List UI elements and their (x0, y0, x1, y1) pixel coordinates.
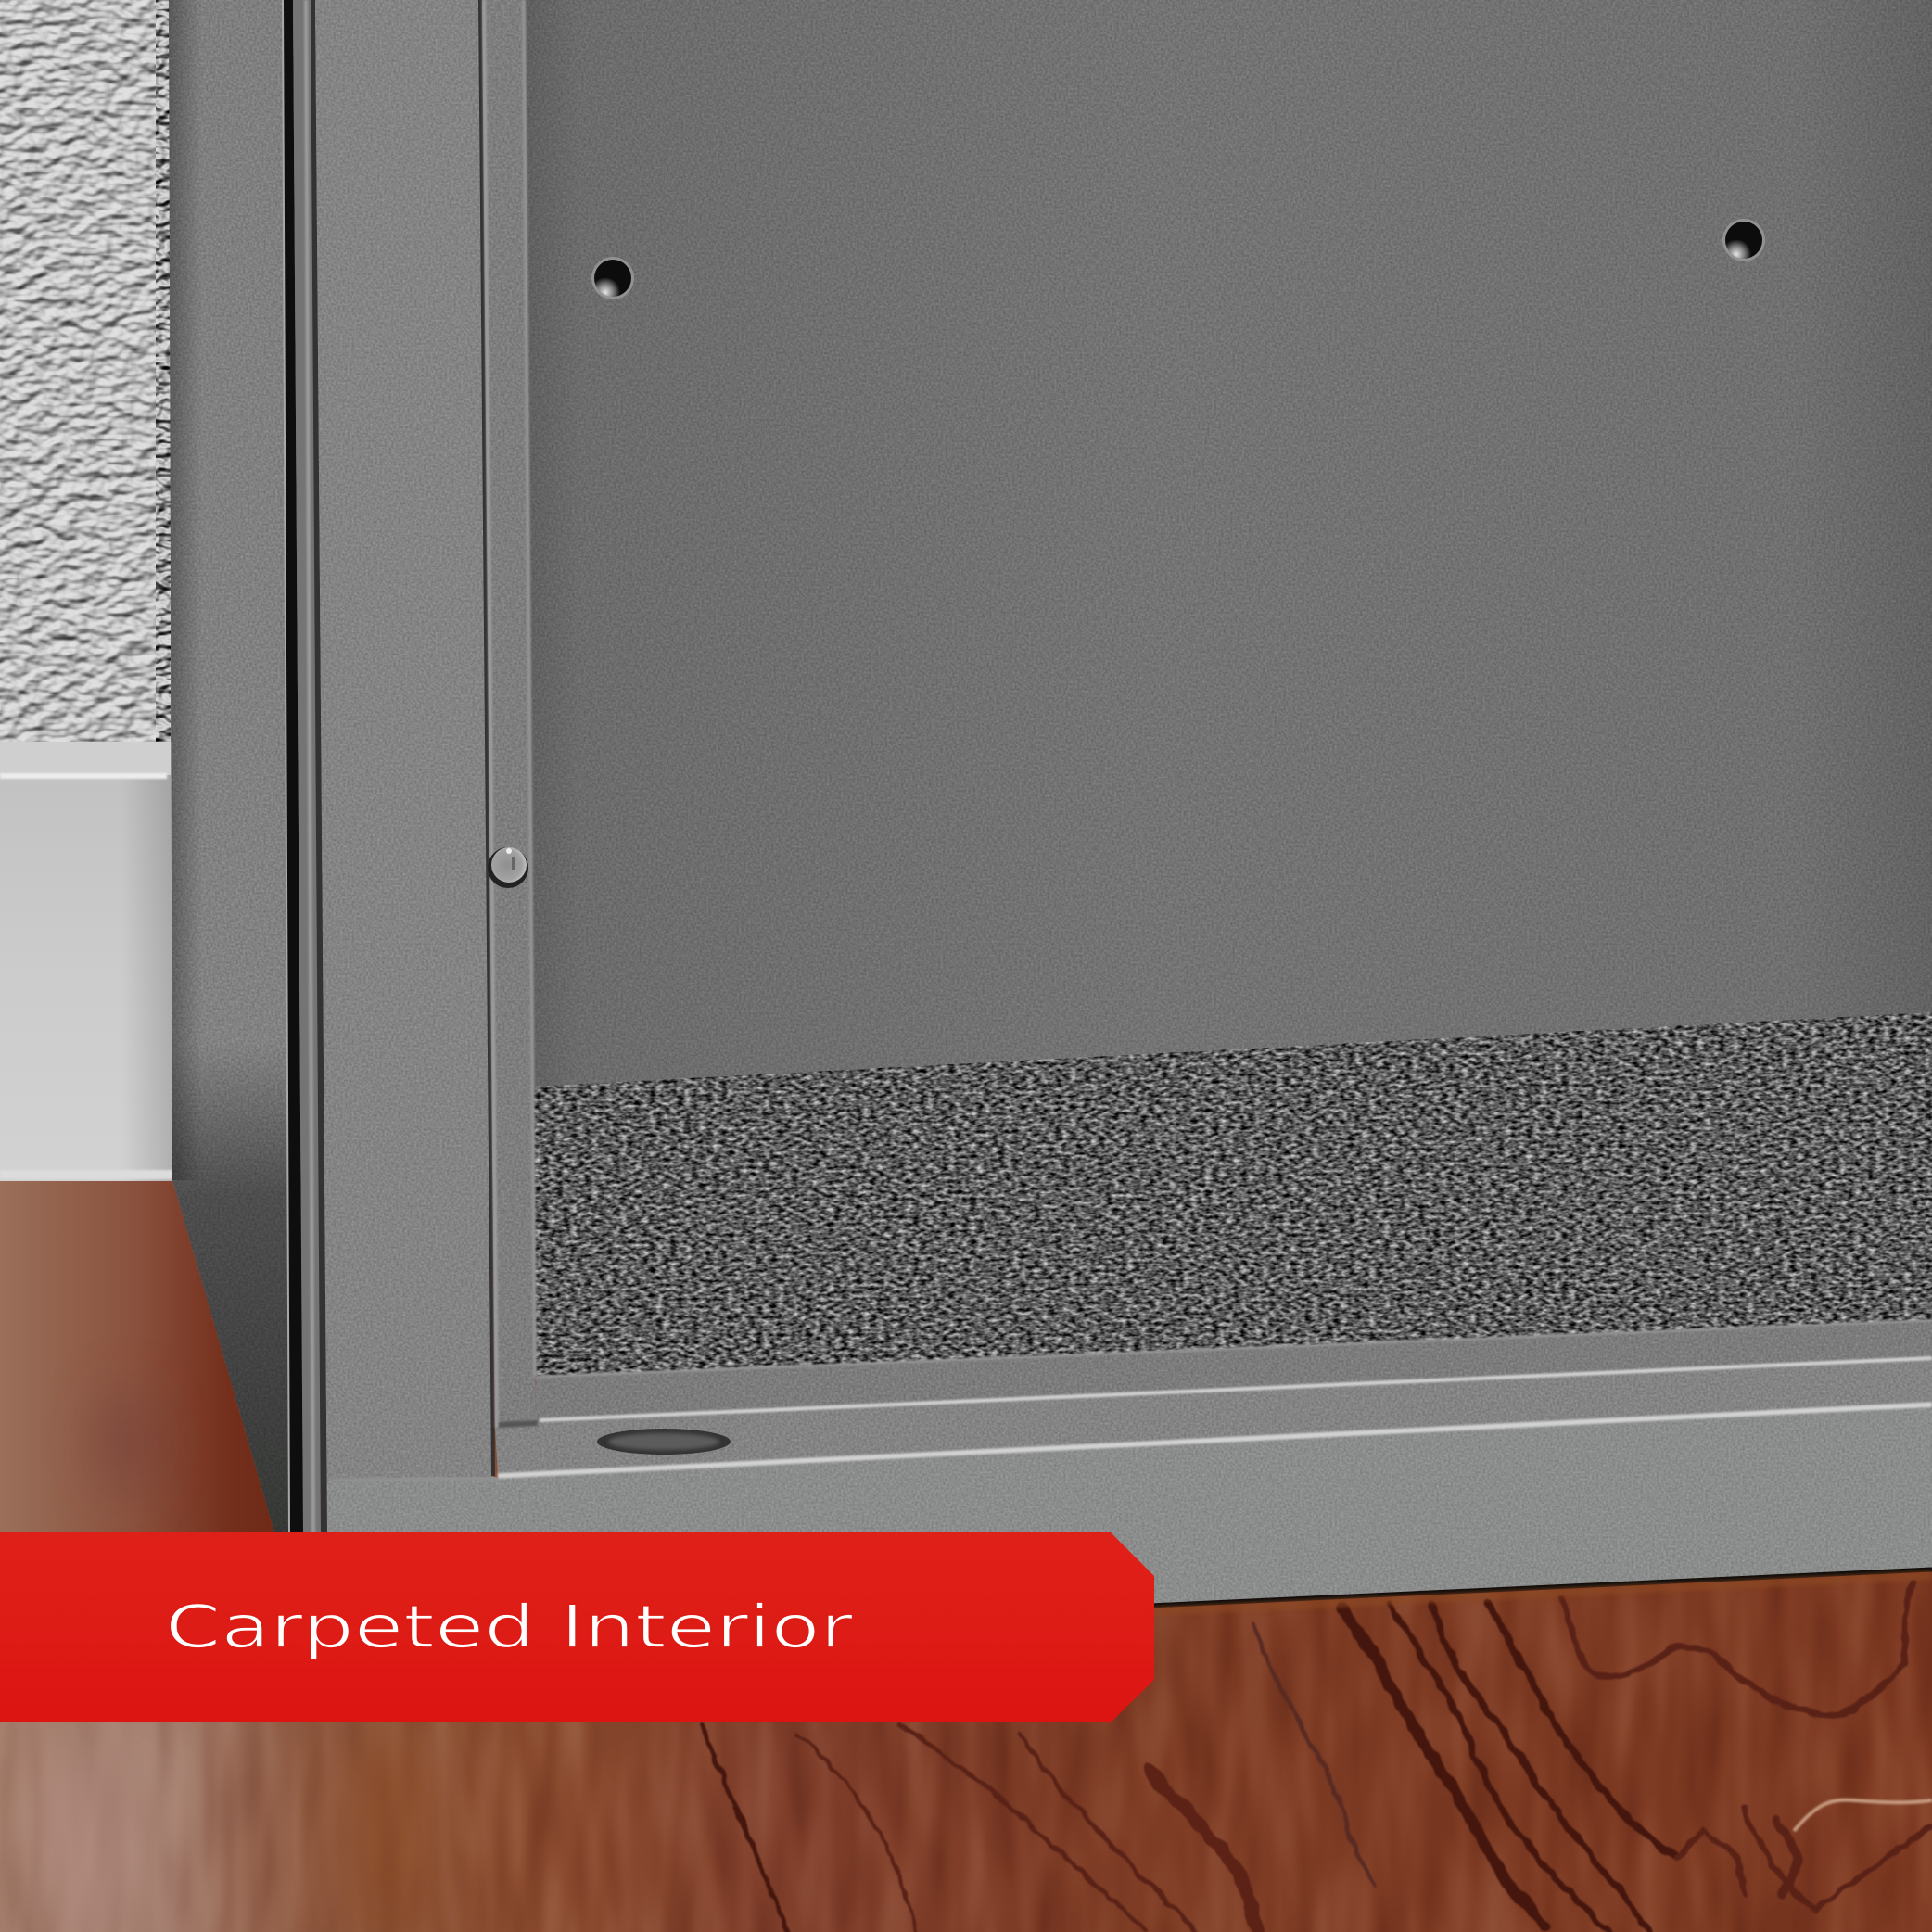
mounting hole left (591, 257, 634, 299)
mounting hole right (1722, 219, 1765, 261)
bottom frame rails (327, 1320, 1932, 1605)
rivet (488, 847, 528, 888)
textured wall (0, 0, 171, 742)
screw recess in rail (597, 1429, 731, 1455)
inner frame strip (478, 0, 537, 1476)
cabinet base shadow line (1150, 1570, 1932, 1611)
banner shape (0, 1532, 1154, 1722)
wood grain lines (702, 1582, 1932, 1932)
wall rough edge (156, 0, 171, 742)
white baseboard (0, 742, 172, 1181)
front frame panel (315, 0, 493, 1532)
door gap and edges (282, 0, 327, 1532)
light ring in wood grain (1794, 1800, 1932, 1831)
red label banner (0, 1532, 1154, 1722)
back wall of cabinet (519, 0, 1932, 1103)
carpet floor (532, 1012, 1932, 1377)
rail highlight lines (498, 1320, 1932, 1476)
banner label text: Carpeted Interior (165, 1594, 854, 1662)
cabinet side panel (169, 0, 292, 1532)
wood floor (0, 1177, 1932, 1932)
